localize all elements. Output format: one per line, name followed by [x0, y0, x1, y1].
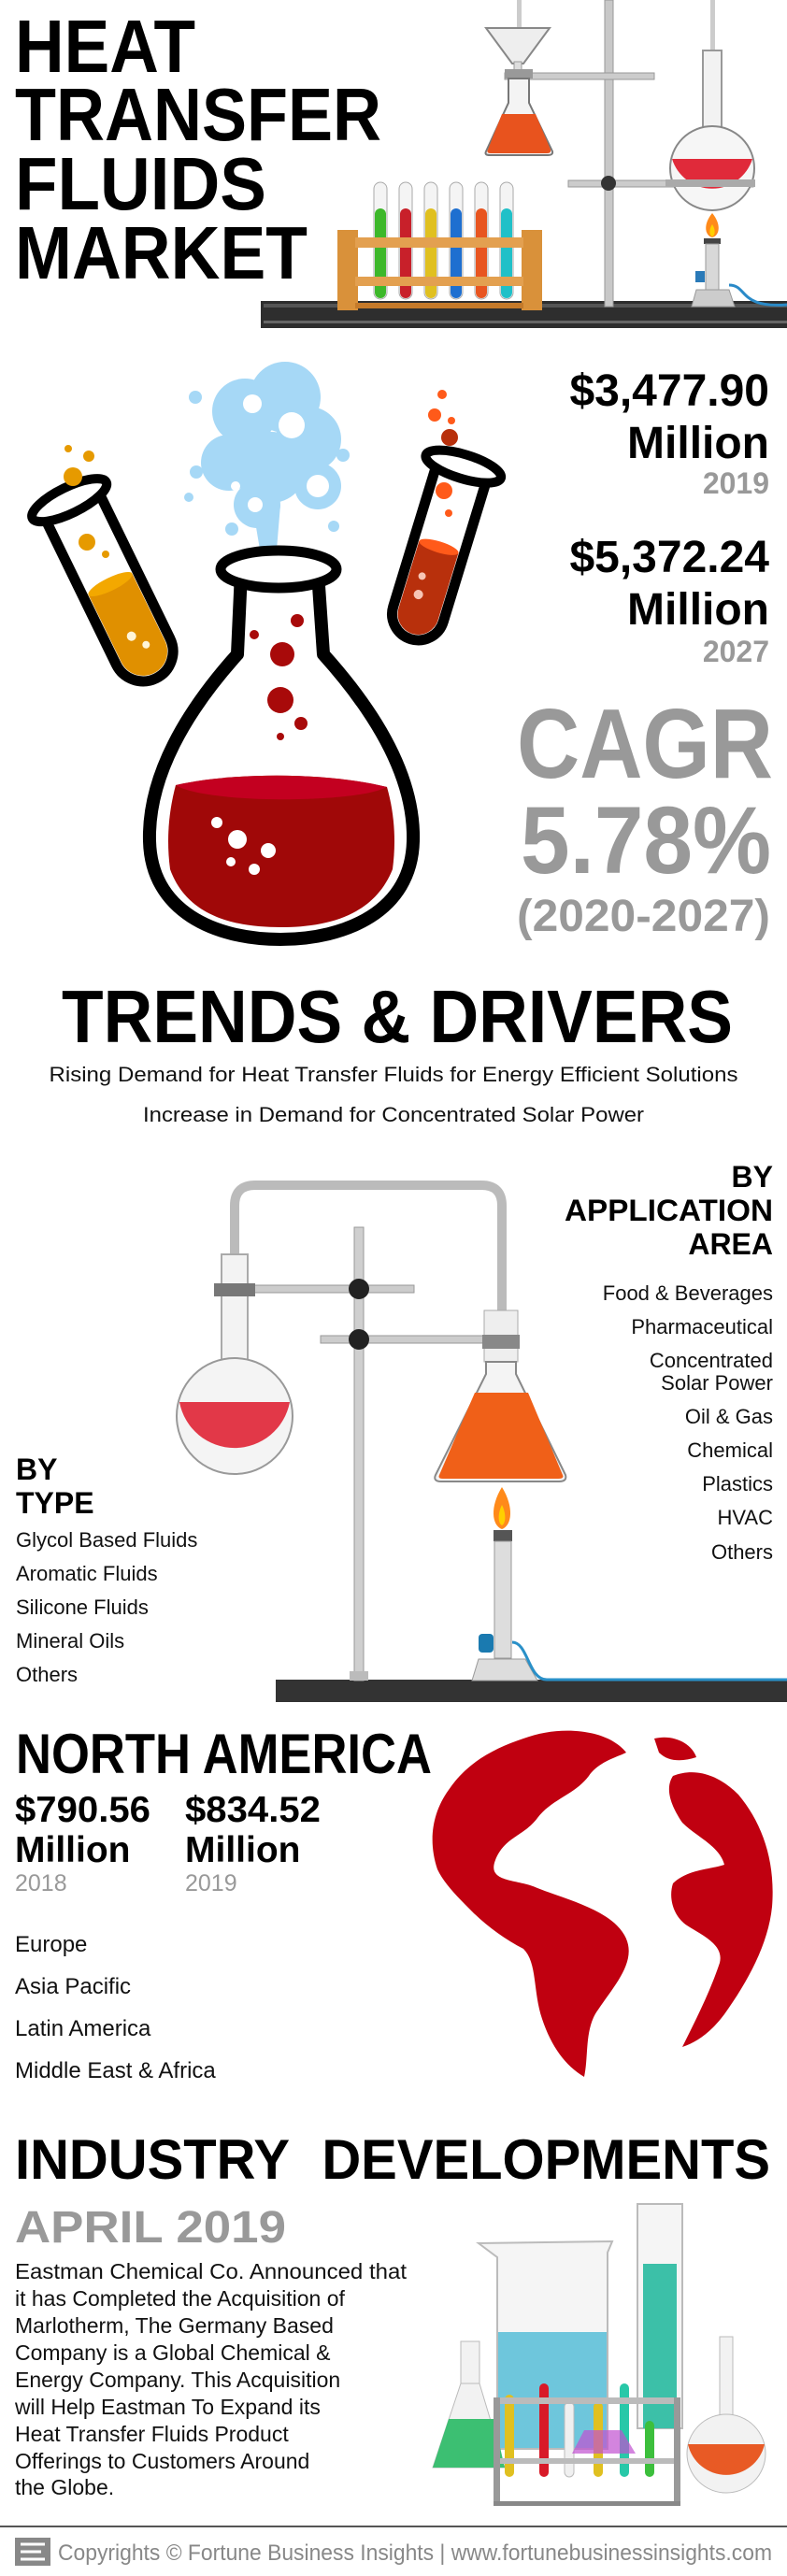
list: HVAC: [718, 1506, 773, 1529]
panel: by application area: [565, 1160, 773, 1564]
market size 2019: [569, 366, 769, 500]
subheading: april 2019: APRIL 2019: [15, 2203, 286, 2253]
round flask: [177, 1254, 293, 1474]
test tube rack: [337, 182, 542, 310]
list: [603, 1281, 773, 1564]
heading: APPLICATION: [565, 1194, 773, 1227]
heading: industry developments: INDUSTRY DEVELOPMENTS: [15, 2128, 770, 2191]
list: regions: Asia Pacific: [15, 1974, 131, 1999]
stat: 2018: $790.56: [15, 1790, 150, 1830]
stat: 2018: [15, 1790, 150, 1896]
title: FLUIDS: [15, 142, 266, 225]
icon: globe: [433, 1731, 773, 2077]
orange round flask: [687, 2337, 766, 2493]
market size 2027: 2027: [703, 635, 769, 668]
icon: logo: [15, 2538, 50, 2566]
green flask: [433, 2341, 505, 2468]
list: regions: Latin America: [15, 2016, 151, 2041]
text: drivers list: Increase in Demand for Concentrated Solar Power: [143, 1103, 644, 1126]
list: regions: Middle East & Africa: [15, 2058, 216, 2083]
tube loop: [235, 1185, 502, 1318]
heading: north america: NORTH AMERICA: [16, 1723, 432, 1785]
illustration: top lab bench: [261, 0, 787, 328]
heading: [565, 1160, 773, 1261]
text: development description: Eastman Chemical Co. Announced that: [15, 2259, 408, 2283]
stat: 2018: 2018: [15, 1870, 67, 1896]
erlenmeyer: [435, 1310, 565, 1481]
list: Aromatic Fluids: [16, 1562, 158, 1585]
bench: [261, 301, 787, 328]
stat: 2019: [185, 1790, 321, 1896]
text: development description: Offerings to Customers Around: [15, 2449, 309, 2473]
list: Glycol Based Fluids: [16, 1528, 197, 1552]
text: drivers list: Rising Demand for Heat Transfer Fluids for Energy Efficient Solutions: [49, 1063, 738, 1086]
burner: [692, 213, 787, 307]
list: Concentrated: [650, 1349, 773, 1372]
pole: [243, 1227, 489, 1681]
text: drivers list: [49, 1063, 738, 1126]
stat: 2019: 2019: [185, 1870, 237, 1896]
heading: BY: [16, 1453, 57, 1486]
illustration: flasks with bubbles: [26, 362, 505, 939]
list: Others: [16, 1663, 78, 1686]
text: development description: will Help Eastman To Expand its: [14, 2395, 321, 2419]
CAGR: [517, 689, 773, 941]
market size 2027: $5,372.24: [569, 533, 769, 582]
list: Oil & Gas: [685, 1405, 773, 1428]
list: Food & Beverages: [603, 1281, 773, 1305]
burner: [472, 1487, 787, 1681]
heading: trends & drivers: TRENDS & DRIVERS: [62, 975, 733, 1058]
big flask: [150, 551, 413, 939]
text: development description: Energy Company. This Acquisition: [15, 2368, 340, 2392]
stat: 2019: Million: [185, 1830, 300, 1870]
right test tube: [373, 443, 505, 651]
text: development description: it has Completed the Acquisition of: [15, 2286, 345, 2311]
list: regions: [15, 1932, 216, 2083]
text: development description: Marlotherm, The Germany Based: [15, 2313, 334, 2338]
market size 2019: $3,477.90: [569, 366, 769, 416]
stat: 2018: Million: [15, 1830, 130, 1870]
illustration: lab glassware: [433, 2204, 766, 2506]
illustration: distillation apparatus: [177, 1185, 787, 1702]
stand pole: [505, 0, 753, 307]
heading: TYPE: [16, 1486, 94, 1520]
market size 2019: 2019: [703, 466, 769, 500]
text: copyright: Copyrights © Fortune Business Insights | www.fortunebusinessinsights.com: [58, 2540, 772, 2566]
CAGR: 5.78%: [521, 787, 771, 894]
title: [15, 5, 381, 294]
heading: BY: [732, 1160, 773, 1194]
round flask: [665, 50, 755, 210]
list: regions: Europe: [15, 1932, 87, 1957]
list: Solar Power: [661, 1371, 773, 1395]
text: development description: [14, 2259, 408, 2499]
footer: [0, 2526, 787, 2566]
heading: AREA: [688, 1227, 773, 1261]
funnel and orange flask: [486, 28, 552, 155]
market size 2019: Million: [627, 419, 769, 468]
heading: [16, 1453, 94, 1520]
left test tube: [26, 470, 193, 696]
bench: [276, 1680, 787, 1702]
list: Chemical: [687, 1438, 773, 1462]
beaker: [479, 2241, 612, 2449]
text: development description: the Globe.: [15, 2475, 114, 2499]
bubble cloud: [184, 362, 350, 561]
list: [16, 1528, 197, 1686]
market size 2027: Million: [627, 585, 769, 635]
CAGR: (2020-2027): [517, 892, 770, 941]
text: development description: Company is a Global Chemical &: [15, 2340, 330, 2365]
list: Silicone Fluids: [16, 1596, 149, 1619]
market size 2027: [569, 533, 769, 668]
test tube rack: [494, 2383, 680, 2506]
panel: by type: [16, 1453, 197, 1686]
stat: 2019: $834.52: [185, 1790, 321, 1830]
title: TRANSFER: [15, 73, 381, 156]
graduated cylinder: [637, 2204, 682, 2428]
list: Others: [711, 1540, 773, 1564]
title: HEAT: [15, 5, 195, 88]
list: Mineral Oils: [16, 1629, 124, 1653]
list: Pharmaceutical: [631, 1315, 773, 1338]
text: development description: Heat Transfer Fluids Product: [15, 2422, 289, 2446]
title: MARKET: [15, 211, 308, 294]
list: Plastics: [702, 1472, 773, 1496]
